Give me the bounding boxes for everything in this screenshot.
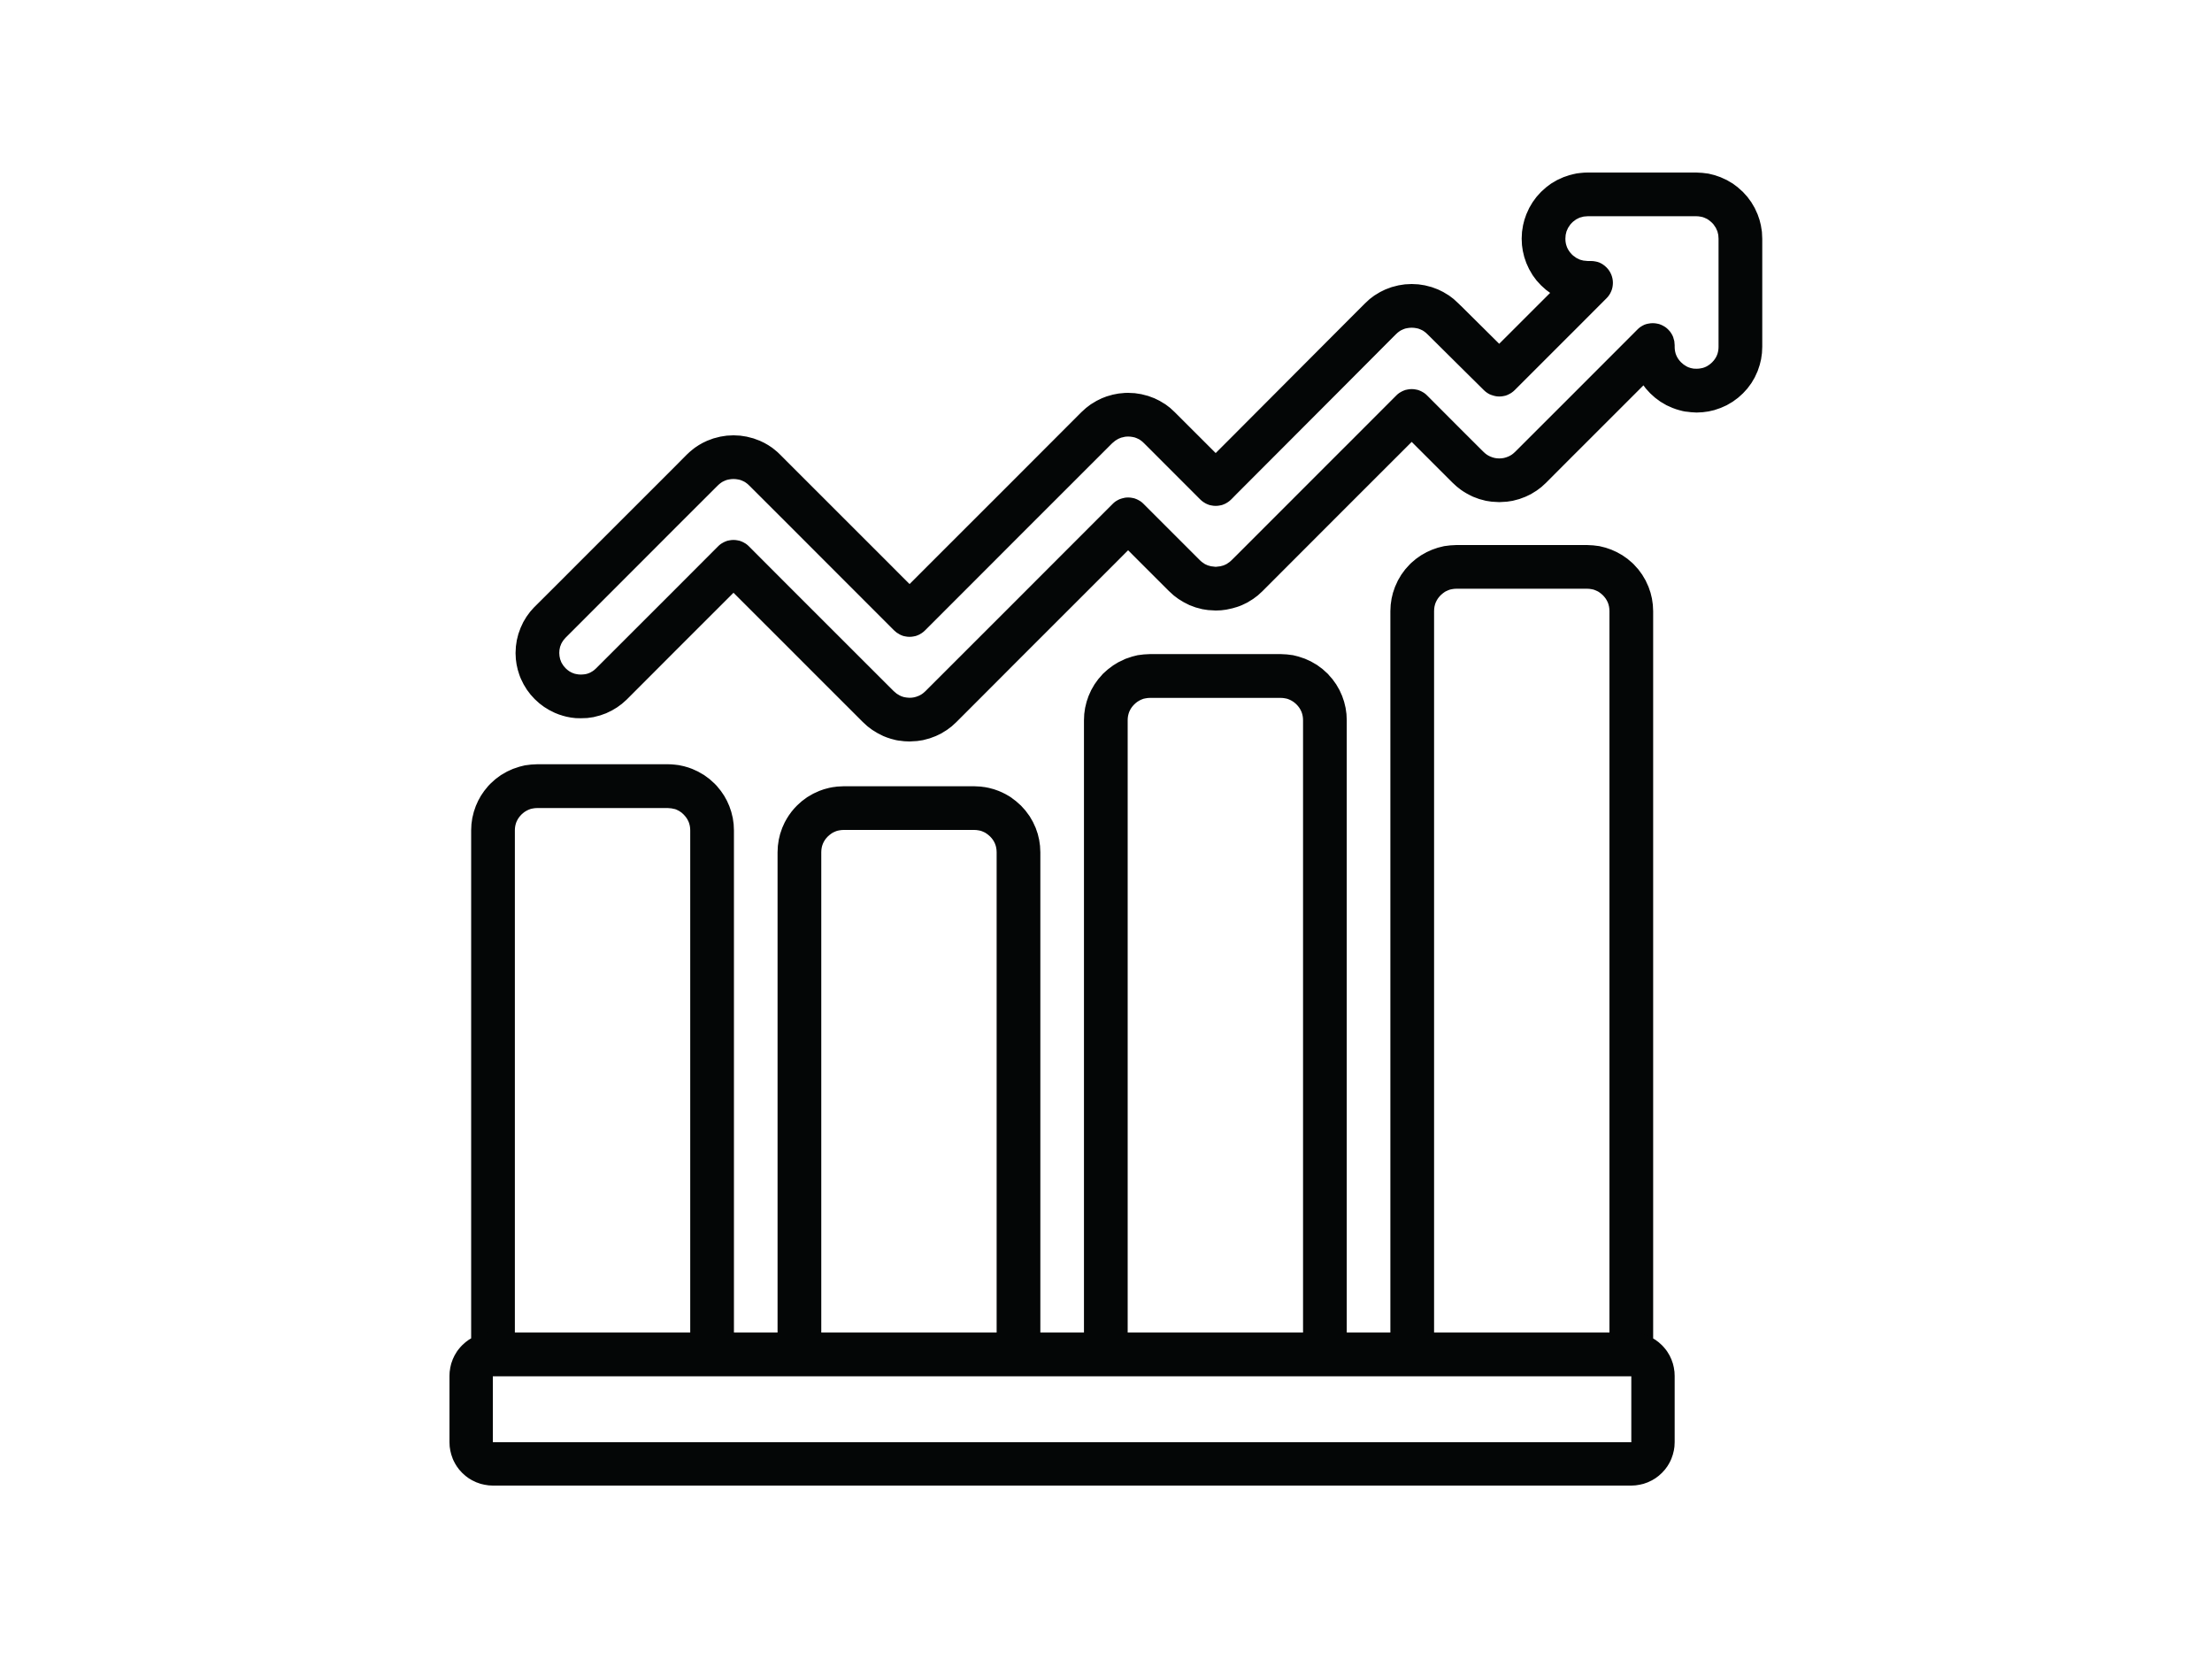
bar 2 bbox=[800, 808, 1018, 1355]
bar 1 bbox=[493, 786, 712, 1355]
bar chart: four bars on a base bbox=[449, 567, 1675, 1486]
bar 4 bbox=[1412, 567, 1632, 1355]
bar 3 bbox=[1106, 676, 1325, 1355]
chart base bbox=[449, 1333, 1675, 1486]
arrow: rising zigzag trend line bbox=[537, 195, 1740, 719]
